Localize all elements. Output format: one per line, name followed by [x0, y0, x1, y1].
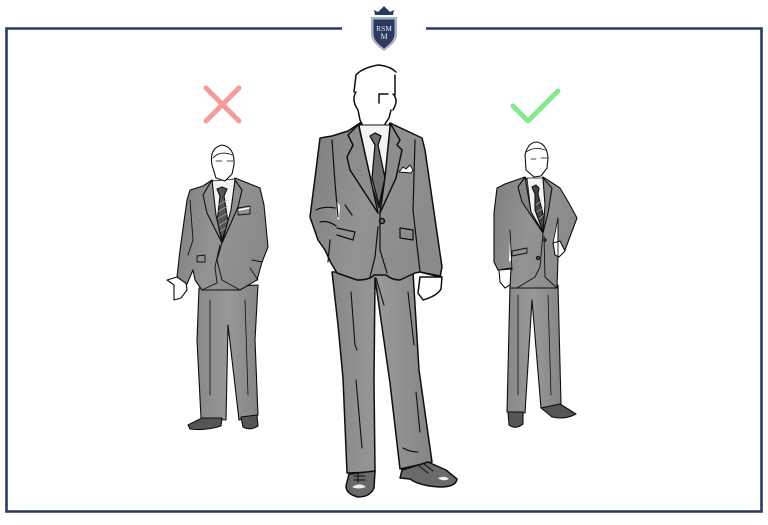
trousers: [507, 285, 561, 413]
trousers: [197, 285, 258, 420]
shirt and tie: [212, 179, 235, 240]
figure: left man: [167, 145, 268, 430]
shirt and tie: [359, 125, 391, 208]
outstretched hand: [167, 277, 187, 300]
arm gap: [336, 200, 340, 220]
logo crest: [371, 6, 397, 51]
left shoe: [346, 471, 375, 497]
head: [354, 66, 398, 123]
logo crest: M: [380, 32, 388, 41]
jacket: [494, 177, 577, 288]
lapels: [347, 123, 402, 213]
right shoe: [400, 462, 457, 487]
jacket details: [188, 200, 262, 290]
jacket details: [316, 140, 441, 277]
logo crest: RSM: [376, 24, 392, 33]
figure: centre man: [310, 65, 457, 497]
right hand: [418, 277, 442, 300]
shoes: [188, 418, 222, 430]
figure: right man: [494, 142, 577, 427]
head: [525, 142, 548, 177]
hands: [499, 269, 513, 288]
arm gap: [553, 218, 558, 257]
shirt and tie: [527, 178, 545, 232]
trousers: [332, 272, 432, 473]
icon: green check: [513, 91, 558, 121]
icon: red cross: [206, 88, 239, 121]
jacket: [177, 178, 268, 290]
shoes: [508, 412, 523, 427]
jacket details: [510, 218, 558, 288]
pocket square: [399, 165, 413, 173]
lapels: [203, 180, 242, 243]
jacket: [310, 123, 442, 280]
lapels: [518, 177, 552, 233]
head: [211, 145, 234, 181]
